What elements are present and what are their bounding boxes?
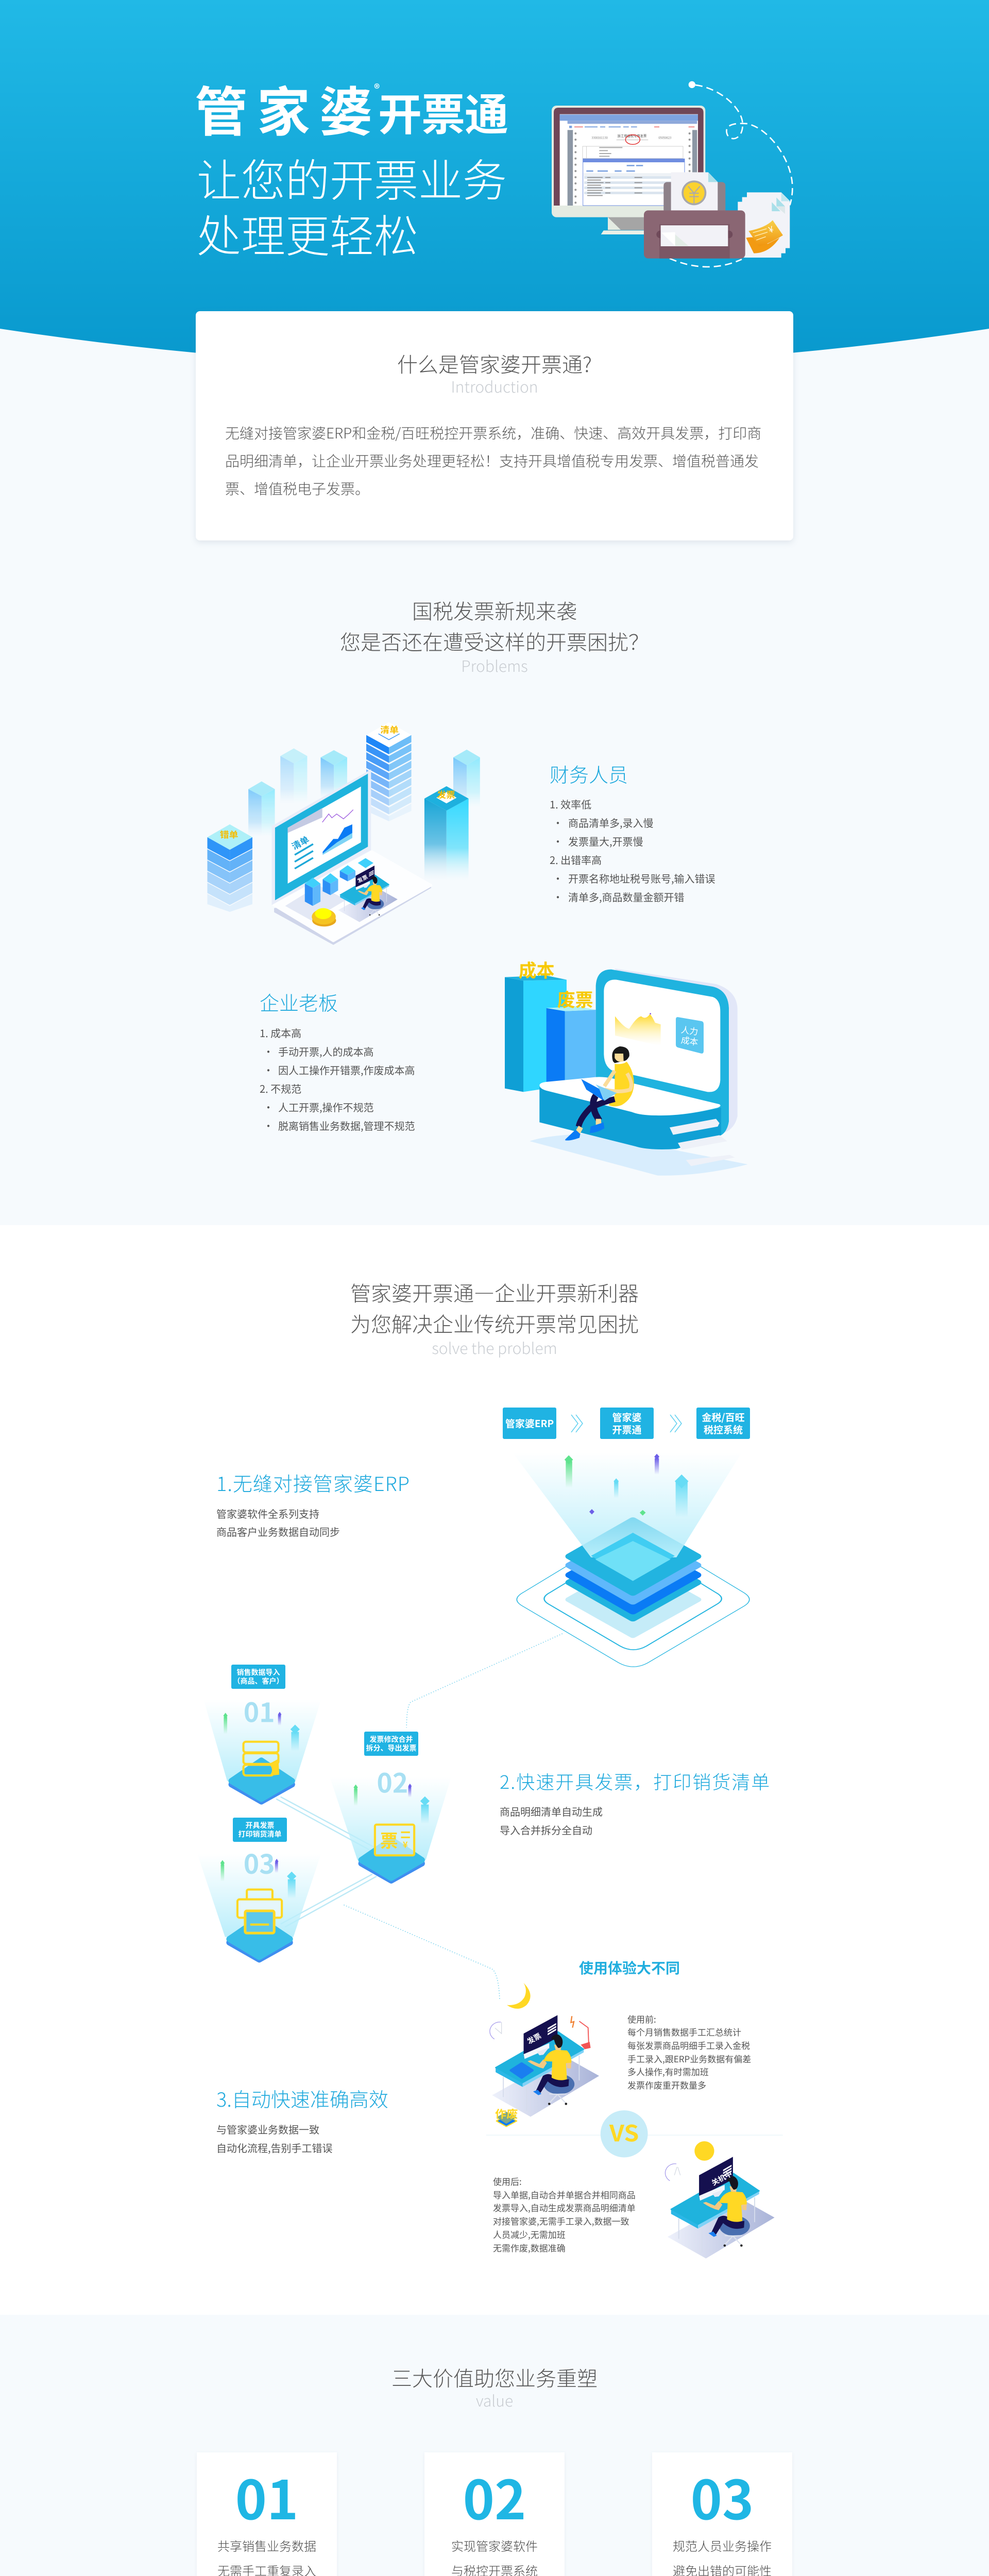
step 1 heading: 1.无缝对接管家婆ERP	[216, 1468, 410, 1497]
step 2 description	[500, 1804, 603, 1837]
owner list: • 因人工操作开错票,作废成本高	[263, 1062, 415, 1077]
illustration: woman with laptop on large monitor: 人力	[680, 1023, 699, 1038]
owner list	[260, 1025, 415, 1133]
illustration: woman with laptop on large monitor: 废票	[557, 986, 593, 1012]
flow box: tax system	[696, 1408, 750, 1439]
card subtitle: Introduction	[451, 375, 538, 397]
step label: invoice edit: 拆分、导出发票	[366, 1742, 416, 1753]
logo: brand wordmark: 开票通	[378, 80, 508, 143]
before text: 发票作废重开数量多	[627, 2078, 706, 2091]
illustration: woman with laptop on large monitor	[505, 957, 747, 1176]
card title: 什么是管家婆开票通?	[397, 348, 592, 378]
heading: value: 三大价值助您业务重塑	[391, 2362, 598, 2392]
illustration: laptop city: 错单	[220, 828, 238, 840]
step 02	[330, 1761, 451, 1880]
VS badge: VS	[609, 2116, 639, 2148]
card paragraph: 无缝对接管家婆ERP和金税/百旺税控开票系统，准确、快速、高效开具发票，打印商	[225, 422, 761, 443]
heading: solve the problem	[350, 1277, 639, 1338]
subheading: problems: Problems	[461, 654, 528, 676]
illustration: woman with laptop on large monitor: 成本	[519, 957, 555, 983]
illustration: woman with laptop on large monitor: 成本	[680, 1033, 699, 1048]
owner heading: 企业老板	[260, 988, 338, 1016]
flow box: ERP: 管家婆ERP	[505, 1416, 554, 1430]
step 02: 02	[377, 1761, 408, 1800]
step 2 description: 导入合并拆分全自动	[500, 1822, 592, 1837]
value card 02: 实现管家婆软件	[451, 2536, 538, 2554]
hero illustration: monitor and printer: 浙江增值税专用发票	[617, 133, 646, 138]
heading: problems: 国税发票新规来袭	[412, 595, 577, 625]
owner list: 1. 成本高	[260, 1025, 301, 1040]
illustration: laptop city: 清单	[289, 833, 311, 852]
after: on-time finish: 关机中	[709, 2169, 734, 2188]
owner list: • 脱离销售业务数据,管理不规范	[263, 1118, 415, 1133]
arrow	[571, 1415, 583, 1432]
hero illustration: monitor and printer: 05050623	[658, 135, 671, 140]
before text: 每个月销售数据手工汇总统计	[627, 2025, 741, 2038]
step 2 description: 商品明细清单自动生成	[500, 1804, 603, 1819]
finance list: • 开票名称地址税号账号,输入错误	[553, 871, 715, 886]
finance list: • 清单多,商品数量金额开错	[553, 889, 685, 904]
owner list: • 人工开票,操作不规范	[263, 1099, 374, 1114]
VS badge	[601, 2110, 648, 2158]
logo: brand wordmark	[195, 70, 508, 146]
step 2 heading: 2.快速开具发票，打印销货清单	[500, 1768, 771, 1794]
step 01: 01	[244, 1691, 275, 1730]
step label: data import: 销售数据导入	[237, 1667, 280, 1677]
before text: 多人操作,有时需加班	[627, 2065, 709, 2078]
before text: 每张发票商品明细手工录入金税	[627, 2039, 750, 2052]
hero curved background	[0, 0, 989, 353]
panel: introduction card	[196, 311, 793, 540]
flow box: invoice tool	[600, 1408, 654, 1439]
after text: 对接管家婆,无需手工录入,数据一致	[493, 2214, 629, 2227]
section background: intro	[0, 0, 989, 1225]
before: night overtime: 作废	[495, 2106, 518, 2121]
value card 03	[652, 2452, 792, 2576]
hero headline: 让您的开票业务	[197, 145, 507, 209]
illustration: laptop city: 清单	[380, 723, 399, 735]
heading: problems	[340, 595, 649, 656]
comparison heading: 使用体验大不同	[579, 1957, 680, 1978]
heading: problems: 您是否还在遭受这样的开票困扰？	[340, 626, 649, 656]
card paragraph	[225, 422, 761, 499]
value card 02	[424, 2452, 565, 2576]
after text: 无需作废,数据准确	[493, 2241, 566, 2254]
step 01	[203, 1691, 321, 1802]
after: on-time finish	[665, 2141, 775, 2259]
step label: invoice edit	[364, 1732, 418, 1756]
panel: finance staff	[550, 759, 715, 904]
value card 02: 02	[463, 2457, 526, 2535]
arrow	[670, 1415, 682, 1432]
comparison illustration	[486, 1983, 783, 2259]
after text	[493, 2175, 636, 2254]
step 02: ¥	[403, 1838, 408, 1850]
step 1 description: 商品客户业务数据自动同步	[216, 1524, 340, 1539]
hero illustration: monitor and printer: 3300161130	[591, 135, 608, 140]
before text: 使用前:	[627, 2012, 656, 2025]
flow box: invoice tool: 管家婆	[612, 1410, 642, 1424]
step 02: 票	[380, 1827, 398, 1853]
flow box: tax system: 税控系统	[704, 1422, 743, 1436]
step label: data import	[231, 1665, 285, 1689]
after text: 导入单据,自动合并单据合并相同商品	[493, 2188, 636, 2201]
before: night overtime: 发票	[525, 2031, 543, 2046]
step 3 description	[216, 2122, 333, 2155]
section background: value	[0, 2315, 989, 2576]
step label: invoice edit: 发票修改合并	[370, 1734, 413, 1744]
illustration: laptop city	[207, 722, 480, 945]
finance list: 1. 效率低	[550, 796, 591, 811]
finance heading: 财务人员	[550, 759, 628, 788]
step 1 description	[216, 1506, 340, 1539]
flow box: ERP	[503, 1408, 556, 1439]
before: night overtime	[490, 1983, 599, 2127]
value card 03: 规范人员业务操作	[673, 2536, 772, 2554]
after text: 发票导入,自动生成发票商品明细清单	[493, 2201, 636, 2214]
illustration: laptop city: 发票	[437, 788, 455, 800]
finance list: 2. 出错率高	[550, 852, 602, 867]
hero illustration: monitor and printer	[552, 81, 793, 268]
step 3 heading: 3.自动快速准确高效	[216, 2084, 388, 2112]
after text: 人员减少,无需加班	[493, 2228, 566, 2241]
before text: 手工录入,跟ERP业务数据有偏差	[627, 2052, 751, 2065]
step 1 description: 管家婆软件全系列支持	[216, 1506, 319, 1521]
finance list: • 商品清单多,录入慢	[553, 815, 654, 830]
illustration: laptop city: 发票	[355, 873, 369, 884]
logo: brand wordmark: ®	[374, 80, 380, 96]
owner list: • 手动开票,人的成本高	[263, 1044, 374, 1059]
panel: business owner	[260, 988, 415, 1133]
flow box: tax system: 金税/百旺	[702, 1410, 745, 1424]
step label: issue invoice: 开具发票	[245, 1820, 274, 1831]
card paragraph: 品明细清单，让企业开票业务处理更轻松！支持开具增值税专用发票、增值税普通发	[225, 450, 759, 471]
finance list	[550, 796, 715, 904]
card paragraph: 票、增值税电子发票。	[225, 478, 369, 499]
hero headline	[197, 145, 507, 265]
hero headline: 处理更轻松	[197, 200, 418, 265]
heading: solve the problem: 管家婆开票通—企业开票新利器	[350, 1277, 639, 1307]
step label: issue invoice: 打印销货清单	[238, 1829, 281, 1839]
step 03: 03	[244, 1843, 275, 1882]
subheading: solve the problem: solve the problem	[432, 1336, 557, 1359]
value card 01: 01	[235, 2457, 298, 2535]
step 03	[197, 1843, 321, 1960]
after text: 使用后:	[493, 2175, 522, 2188]
illustration: layered platform	[516, 1454, 750, 1667]
finance list: • 发票量大,开票慢	[553, 834, 643, 849]
step 3 description: 自动化流程,告别手工错误	[216, 2140, 333, 2155]
step label: issue invoice	[233, 1818, 287, 1842]
heading: solve the problem: 为您解决企业传统开票常见困扰	[350, 1308, 639, 1338]
hero illustration: monitor and printer: ¥	[766, 222, 775, 235]
flow box: invoice tool: 开票通	[612, 1422, 642, 1436]
value card 03: 03	[691, 2457, 754, 2535]
flow diagram: three steps	[201, 1633, 562, 1999]
value card 01: 共享销售业务数据	[217, 2536, 316, 2554]
before text	[627, 2012, 751, 2091]
step label: data import: （商品、客户）	[233, 1675, 283, 1686]
step 3 description: 与管家婆业务数据一致	[216, 2122, 319, 2137]
owner list: 2. 不规范	[260, 1081, 301, 1096]
value card 01	[197, 2452, 337, 2576]
subheading: value: value	[476, 2388, 513, 2411]
logo: brand wordmark: 管家婆	[195, 70, 382, 146]
